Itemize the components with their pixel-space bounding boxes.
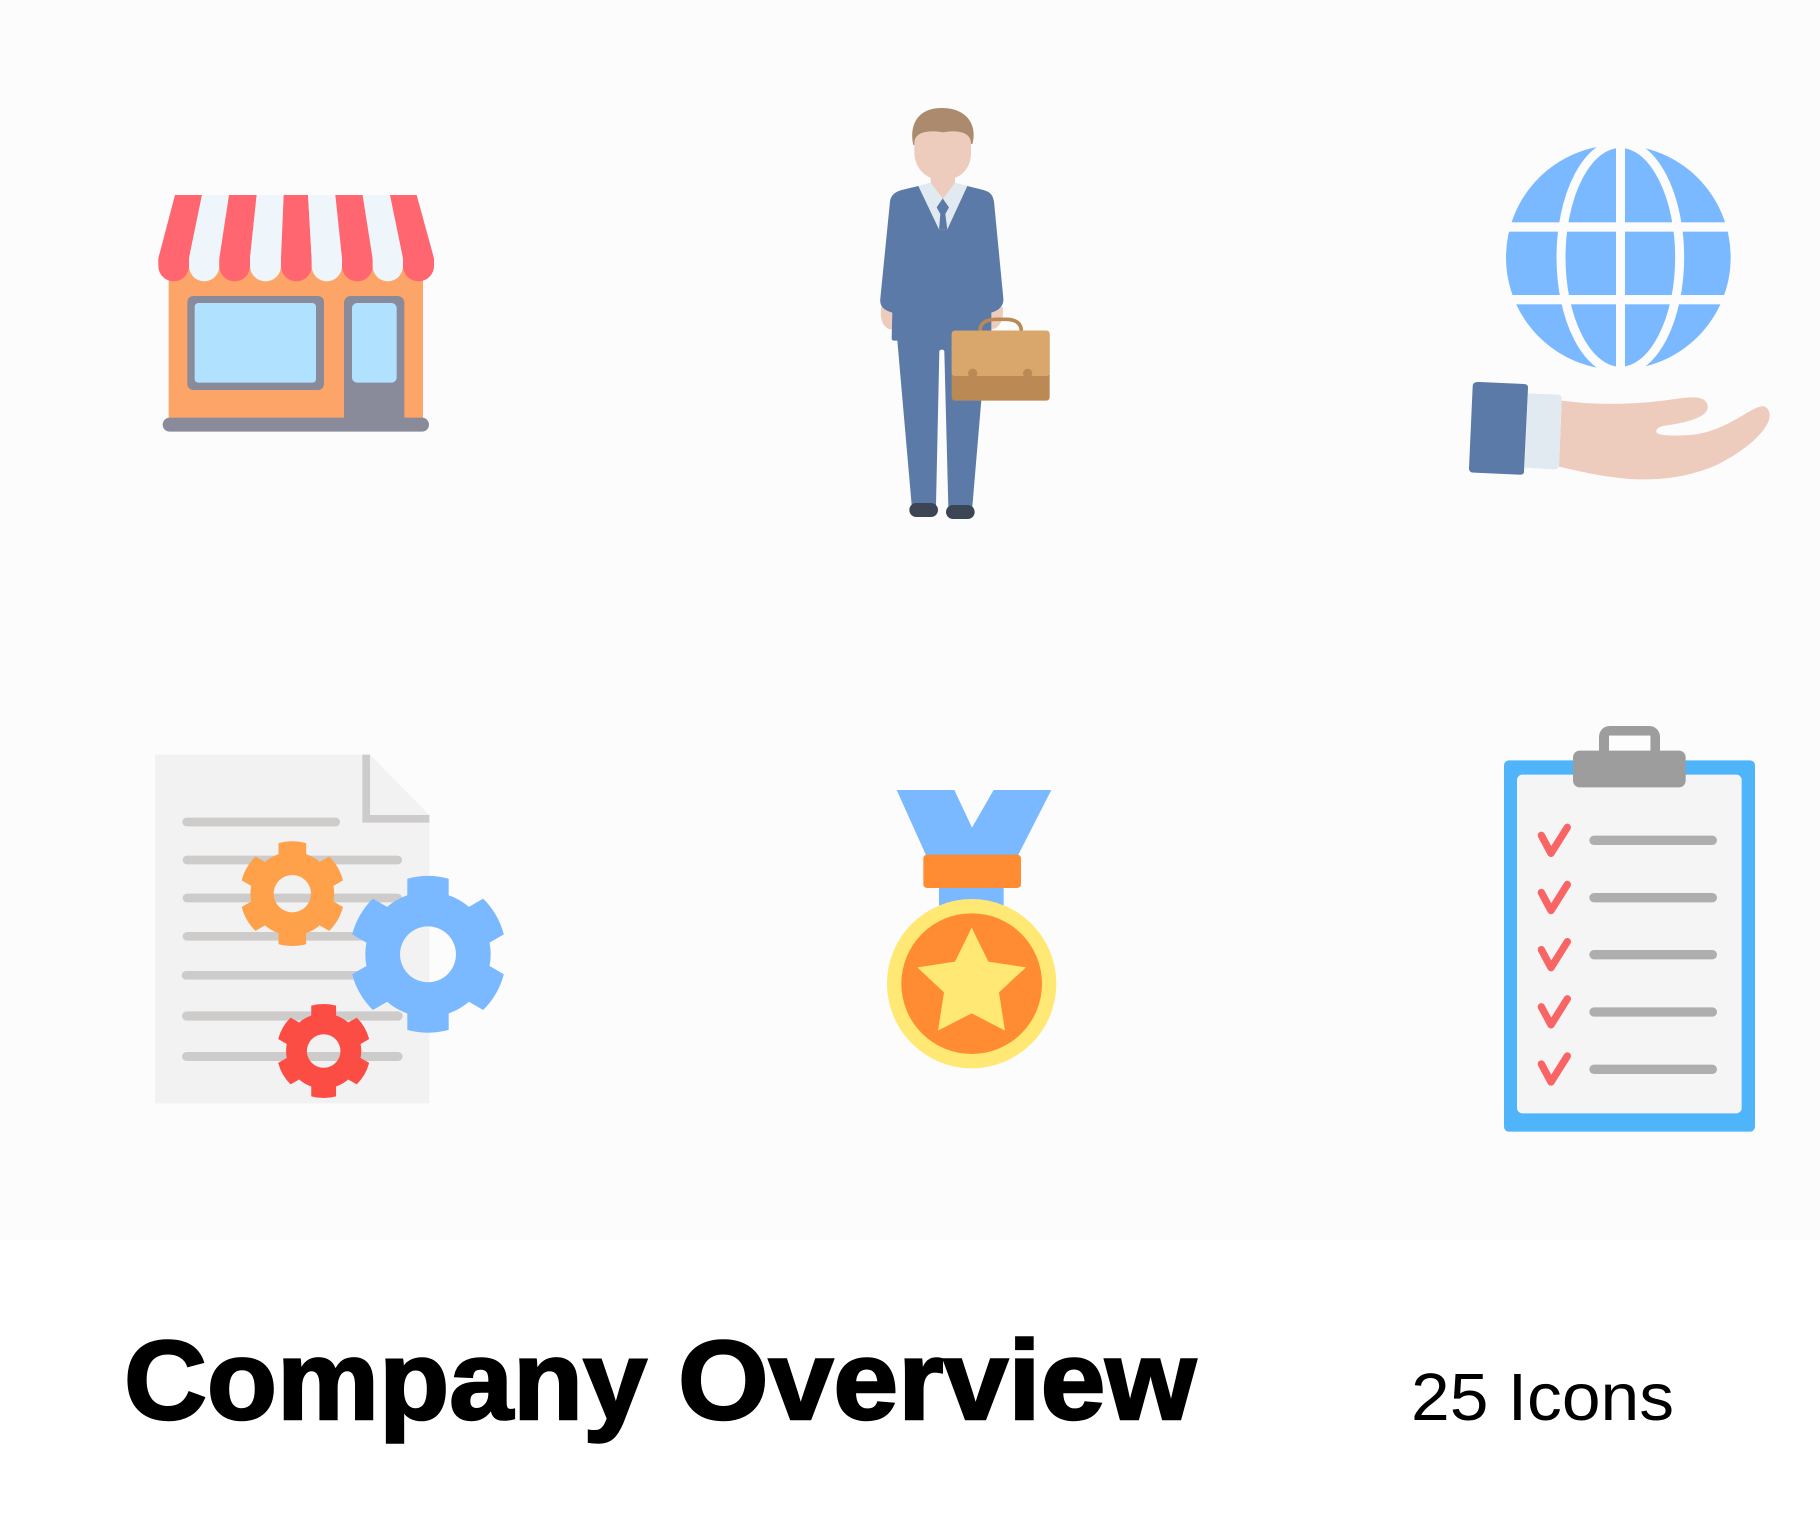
ribbon clasp <box>923 855 1021 888</box>
suit <box>880 186 1003 507</box>
icon: businessman with briefcase <box>880 108 1050 519</box>
necktie <box>937 198 949 229</box>
gear: blue <box>352 876 504 1033</box>
hand <box>1559 397 1770 479</box>
store door <box>344 296 404 427</box>
clipboard paper <box>1517 775 1742 1113</box>
shoes <box>909 503 975 519</box>
face and neck <box>914 131 971 200</box>
hair <box>912 108 974 145</box>
store floor <box>163 418 429 432</box>
gear: red <box>278 1004 369 1098</box>
jacket sleeve <box>1469 382 1528 475</box>
icon: document with gears <box>155 755 504 1103</box>
hands <box>881 307 1003 330</box>
globe <box>1500 140 1737 375</box>
check marks <box>1541 827 1567 1082</box>
store wall <box>169 260 423 420</box>
icon: globe on open hand <box>1469 140 1770 479</box>
icon: checklist clipboard <box>1504 726 1755 1132</box>
star <box>917 928 1026 1031</box>
icon count label: 25 Icons <box>1411 1360 1674 1435</box>
title <box>124 1318 1197 1443</box>
shirt collar <box>918 183 967 229</box>
folded corner <box>362 755 429 823</box>
document text lines <box>182 818 403 1061</box>
clipboard board <box>1504 760 1755 1132</box>
shirt cuff <box>1525 393 1562 469</box>
icon: storefront <box>158 195 434 432</box>
clipboard clip <box>1573 726 1686 787</box>
medal ribbon <box>897 790 1051 908</box>
title: Overview <box>678 1318 1197 1443</box>
briefcase <box>952 319 1050 401</box>
icon: star medal <box>887 790 1056 1068</box>
store window <box>187 296 324 390</box>
striped awning <box>158 195 434 281</box>
gear: orange <box>242 841 343 946</box>
document page <box>155 755 429 1103</box>
checklist lines <box>1589 836 1717 1074</box>
title: Company <box>124 1318 647 1443</box>
medal disc <box>887 899 1056 1068</box>
